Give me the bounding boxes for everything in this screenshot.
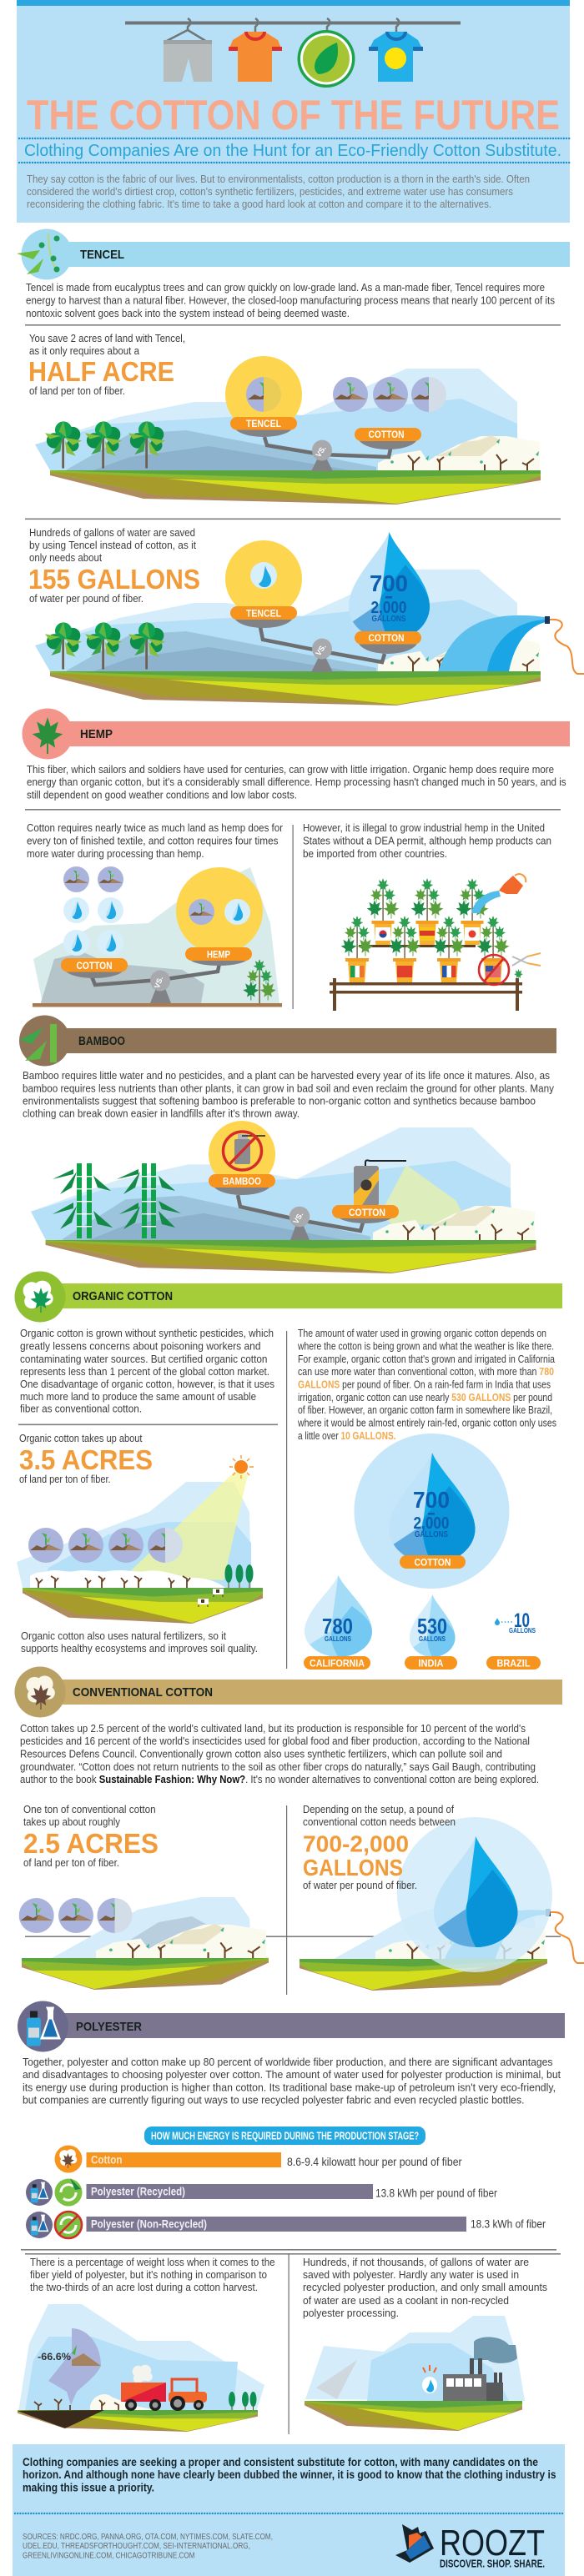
text: 3.5 acres stat: 3.5 ACRES <box>19 1444 153 1475</box>
land icons <box>333 377 446 412</box>
bar chart: energy required <box>26 2127 546 2238</box>
water numbers: 2,000 <box>370 599 407 617</box>
hose and water <box>438 615 584 674</box>
tencel pan <box>225 540 302 628</box>
text: 700-2,000 gallons stat <box>303 1803 456 1891</box>
icon: Roozt arrow <box>395 2524 434 2563</box>
scene: bamboo vs cotton <box>31 1121 536 1273</box>
cows <box>198 1589 224 1607</box>
text: half acre stat <box>28 332 185 397</box>
tencel pan: TENCEL <box>246 418 281 429</box>
lower plants <box>341 916 509 983</box>
text: 700-2,000 gallons stat: 700-2,000 <box>303 1831 409 1856</box>
text: hemp description: still dependent on good weather conditions and low labor costs. <box>27 789 297 801</box>
tencel pan: TENCEL <box>246 607 281 619</box>
bamboo stalks <box>53 1163 181 1238</box>
text: Tencel description <box>26 281 555 319</box>
text: polyester water use: of water are used as a coolant in non-recycled <box>303 2294 509 2307</box>
cotton pan with pesticide <box>332 1160 406 1223</box>
text: sources: SOURCES: NRDC.ORG, PANNA.ORG, OTA.COM, NYTIMES.COM, SLATE.COM, <box>23 2532 273 2542</box>
text: hemp land and water: more water during processing than hemp. <box>27 847 204 860</box>
heading: Hemp <box>22 709 570 759</box>
text: fiber yield: There is a percentage of weight loss when it comes to the <box>30 2256 275 2268</box>
heading: Organic Cotton <box>15 1271 562 1323</box>
text: polyester description: and disadvantages to choosing polyester over cotton. The amount of water used for polyester production is minimal, but <box>23 2068 561 2081</box>
cotton pan <box>349 532 430 654</box>
text: polyester description <box>23 2056 561 2106</box>
text: polyester water use: saved with polyester. Hardly any water is used in <box>303 2268 519 2281</box>
text: 2.5 acres stat: 2.5 ACRES <box>23 1828 159 1859</box>
icon: conventional cotton boll <box>26 1675 55 1710</box>
india drop: GALLONS <box>419 1635 446 1643</box>
text: organic cotton water use: can use more water than conventional cotton, with more than 780 <box>298 1365 554 1378</box>
text: 155 gallons stat: only needs about <box>29 551 102 564</box>
text: conclusion: making this issue a priority. <box>23 2482 154 2493</box>
upper plants <box>359 878 488 947</box>
icon: tractor <box>121 2365 207 2411</box>
india drop: 530 <box>417 1614 447 1639</box>
row: polyester recycled: 13.8 kWh per pound of fiber <box>375 2187 497 2200</box>
land icons <box>28 1528 183 1563</box>
icon: orange shirt <box>229 18 282 82</box>
text: polyester description: Together, polyester and cotton make up 80 percent of worldwide fiber production, and there are significant advantages <box>23 2056 553 2068</box>
india drop: INDIA <box>419 1658 444 1670</box>
text: 3.5 acres stat: Organic cotton takes up about <box>19 1432 143 1444</box>
text: organic cotton description <box>20 1327 274 1414</box>
california drop: GALLONS <box>325 1635 352 1643</box>
text: organic cotton description: greatly lessens concerns about poisoning workers and <box>20 1339 260 1353</box>
cotton pan with pesticide: COTTON <box>349 1207 385 1218</box>
text: 700-2,000 gallons stat: conventional cotton needs between <box>303 1815 456 1828</box>
cotton drop: 2,000 <box>414 1514 449 1533</box>
icon: clothes rack <box>125 18 461 88</box>
heading: Organic Cotton: ORGANIC COTTON <box>73 1289 173 1303</box>
text: hemp land and water: every ton of finished textile, and cotton requires four times <box>27 834 279 847</box>
intro text: considered the world's dirtiest crop, cotton's synthetic fertilizers, pesticides, and extreme water use has consumers <box>27 185 513 198</box>
text: bamboo description <box>23 1069 554 1119</box>
text: polyester water use: polyester processing. <box>303 2307 399 2319</box>
text: half acre stat: as it only requires about a <box>29 344 140 357</box>
water numbers <box>370 570 408 624</box>
icon: prohibition sign <box>479 955 509 985</box>
row: polyester recycled: Polyester (Recycled) <box>91 2185 185 2198</box>
text: 700-2,000 gallons stat: GALLONS <box>303 1855 403 1881</box>
text: 2.5 acres stat: of land per ton of fiber. <box>23 1856 119 1869</box>
water numbers: GALLONS <box>372 615 406 624</box>
text: conventional cotton description: author to the book Sustainable Fashion: Why Now?. It's no wonder alternatives to conventional cotton are being explored. <box>20 1773 539 1785</box>
text: sources: GREENLIVINGONLINE.COM, CHICAGOTRIBUNE.COM <box>23 2550 195 2560</box>
cotton pan <box>61 958 128 978</box>
scale: tencel vs cotton water: VS. <box>314 642 328 657</box>
text: conventional cotton description <box>20 1722 539 1785</box>
scale arm <box>92 963 219 1003</box>
text: sources: UDEL.EDU, THREADSFORTHOUGHT.COM, SEI-INTERNATIONAL.ORG, <box>23 2541 250 2551</box>
scene: water comparison <box>35 532 584 706</box>
text: conventional cotton description: pesticides and 16 percent of the world's insecticides used for global food and fiber production, according to the National <box>20 1735 530 1747</box>
row: cotton: 8.6-9.4 kilowatt hour per pound of fiber <box>287 2156 462 2168</box>
scene: factory <box>305 2316 525 2431</box>
text: polyester water use: Hundreds, if not thousands, of gallons of water are <box>303 2256 529 2268</box>
row: polyester recycled <box>26 2178 497 2207</box>
icon: water alert <box>422 2365 437 2393</box>
text: organic cotton water use <box>297 1327 556 1442</box>
text: conventional cotton description: groundwater. “Cotton does not return nutrients to the soil as other fiber crops do naturally,” says Gail Baugh, contributing <box>20 1760 536 1773</box>
text: polyester description: its energy use during production is higher than cotton. Its traditional base make-up of petroleum isn't very eco-friendly, <box>23 2081 556 2093</box>
heading: Polyester <box>18 2001 565 2051</box>
california drop: 780 <box>322 1614 353 1639</box>
cotton pan: COTTON <box>77 960 112 972</box>
text: 700-2,000 gallons stat: of water per pound of fiber. <box>303 1879 417 1891</box>
heading: Polyester: POLYESTER <box>76 2020 142 2034</box>
icon: green leaf badge <box>297 18 355 88</box>
text: organic cotton water use: irrigation, organic cotton can use nearly 530 GALLONS per pound <box>298 1391 552 1403</box>
intro text: reconsidering the clothing fabric. It's time to take a good hard look at cotton and compare it to the alternatives. <box>27 198 491 210</box>
california drop: CALIFORNIA <box>310 1658 365 1670</box>
row: polyester non-recycled: Polyester (Non-Recycled) <box>91 2217 207 2230</box>
text: half acre stat: of land per ton of fiber. <box>29 384 125 397</box>
panel: conclusion footer <box>13 2444 565 2576</box>
hemp balloon: HEMP <box>207 949 230 961</box>
land and water icons: cotton <box>63 866 123 956</box>
icon: hemp plant <box>243 959 276 1003</box>
text: hemp legality: However, it is illegal to grow industrial hemp in the United <box>303 821 545 834</box>
text: half acre stat: You save 2 acres of land with Tencel, <box>29 332 185 344</box>
text: organic cotton water use: a little over 10 GALLONS. <box>298 1429 395 1442</box>
text: 700-2,000 gallons stat: Depending on the setup, a pound of <box>303 1803 454 1815</box>
text: hemp legality: States without a DEA permit, although hemp products can <box>303 834 551 847</box>
scene: conventional water <box>300 1817 584 1991</box>
panel: header <box>17 0 570 223</box>
text: conclusion <box>23 2456 556 2493</box>
text: conventional cotton description: Cotton takes up 2.5 percent of the world's cultivated land, but its production is responsible for 10 percent of the world's <box>20 1722 526 1735</box>
row: polyester non-recycled <box>26 2212 546 2238</box>
text: 155 gallons stat: 155 GALLONS <box>28 564 200 595</box>
row: cotton: Cotton <box>91 2153 122 2167</box>
trees <box>225 1564 254 1588</box>
water numbers: 700 <box>370 570 408 596</box>
text: polyester water use <box>303 2256 547 2319</box>
heading: Bamboo: BAMBOO <box>78 1034 125 1048</box>
scale arm <box>238 1195 363 1240</box>
text: hemp description <box>27 763 566 801</box>
trees <box>229 2392 257 2410</box>
text: fiber yield: fiber yield of polyester, but it's nothing in comparison to <box>30 2268 267 2281</box>
text: 2.5 acres stat: One ton of conventional cotton <box>23 1803 156 1815</box>
heading: Tencel: TENCEL <box>80 248 124 262</box>
icon: eucalyptus <box>17 233 60 274</box>
scene: land comparison <box>35 356 541 505</box>
scene: harvest <box>18 2304 264 2432</box>
text: conclusion: Clothing companies are seeking a proper and consistent substitute for cotton, with many candidates on the <box>23 2456 538 2468</box>
subtitle: Clothing Companies Are on the Hunt for an Eco-Friendly Cotton Substitute. <box>24 142 561 160</box>
heading: Bamboo <box>19 1016 556 1066</box>
icon: scissors <box>512 953 541 966</box>
text: hemp land and water: Cotton requires nearly twice as much land as hemp does for <box>27 821 284 834</box>
icon: organic cotton boll <box>23 1281 53 1313</box>
logo: Roozt: DISCOVER. SHOP. SHARE. <box>440 2558 545 2570</box>
text: 155 gallons stat <box>28 526 200 605</box>
text: fiber yield: the two-thirds of an acre lost during a cotton harvest. <box>30 2281 258 2293</box>
chart: water use drops <box>304 1434 541 1670</box>
bamboo balloon <box>209 1121 275 1195</box>
text: organic cotton description: represents less than 1 percent of the global cotton market. <box>20 1365 269 1378</box>
hemp balloon <box>176 867 263 966</box>
scene: organic farm <box>17 1455 263 1624</box>
heading: Conventional Cotton: CONVENTIONAL COTTON <box>73 1685 213 1700</box>
brazil drop: GALLONS <box>509 1627 536 1634</box>
scene: conventional land <box>19 1897 269 1990</box>
chart title: HOW MUCH ENERGY IS REQUIRED DURING THE PRODUCTION STAGE? <box>151 2130 419 2142</box>
bench <box>330 978 522 1011</box>
text: organic cotton description: fiber as conventional cotton. <box>20 1403 142 1414</box>
text: organic cotton description: Organic cotton is grown without synthetic pesticides, which <box>20 1327 274 1339</box>
intro text: They say cotton is the fabric of our lives. But to environmentalists, cotton production is a thorn in the earth's side. Often <box>27 173 530 185</box>
text: polyester water use: recycled polyester production, and only small amounts <box>303 2281 547 2293</box>
row: cotton <box>55 2145 462 2173</box>
cotton field <box>34 2394 159 2410</box>
icon: factory <box>443 2337 517 2401</box>
text: hemp land and water <box>27 821 284 860</box>
icon: blue shirt <box>369 18 423 82</box>
brazil drop: 10 <box>514 1609 530 1632</box>
icon: polyester flask <box>18 2001 68 2051</box>
label: loss percentage: -66.6% <box>38 2351 71 2363</box>
text: 3.5 acres stat: of land per ton of fiber. <box>19 1473 111 1485</box>
text: hemp legality <box>303 821 551 860</box>
text: polyester description: but companies are currently figuring out ways to use recycled polyester fabric and even recycled plastic bottles. <box>23 2093 524 2106</box>
heading: Hemp: HEMP <box>80 727 113 741</box>
text: sources <box>23 2532 273 2560</box>
text: organic cotton description: contaminating water sources. But certified organic cotton <box>20 1353 267 1365</box>
text: fiber yield <box>30 2256 275 2293</box>
spray cone <box>380 1165 467 1224</box>
text: 2.5 acres stat: takes up about roughly <box>23 1815 120 1828</box>
brazil drop <box>486 1609 541 1670</box>
illustration: potted hemp on bench <box>330 874 541 1011</box>
text: natural fertilizers: supports healthy ecosystems and improves soil quality. <box>21 1642 258 1655</box>
icon: bamboo <box>20 1024 57 1062</box>
text: 155 gallons stat: Hundreds of gallons of water are saved <box>29 526 195 539</box>
icon: watering can <box>471 874 526 913</box>
text: hemp legality: be imported from other countries. <box>303 847 447 860</box>
cotton field <box>30 1570 225 1588</box>
land loss plume <box>48 2328 101 2405</box>
icon: hemp leaf <box>33 717 63 754</box>
text: organic cotton description: One disadvantage of organic cotton, however, is that it uses <box>20 1378 274 1390</box>
cotton drop: COTTON <box>414 1556 451 1568</box>
intro text <box>27 173 530 210</box>
text: half acre stat: HALF ACRE <box>28 356 174 387</box>
text: 2.5 acres stat <box>23 1803 159 1869</box>
text: bamboo description: environmentalists suggest that softening bamboo is preferable to non-organic cotton and synthetics because bamboo <box>23 1094 536 1107</box>
heading: Conventional Cotton <box>15 1666 562 1718</box>
logo: Roozt <box>395 2523 545 2570</box>
cotton drop: GALLONS <box>415 1530 448 1539</box>
row: polyester non-recycled: 18.3 kWh of fiber <box>471 2218 546 2230</box>
bamboo balloon: BAMBOO <box>223 1176 261 1188</box>
tencel pan <box>225 356 302 437</box>
text: bamboo description: clothing can break down easier in landfills after it's thrown away. <box>23 1107 300 1119</box>
heading: Tencel <box>17 228 570 280</box>
california drop <box>304 1575 372 1670</box>
text: organic cotton description: much more land to produce the same amount of usable <box>20 1390 256 1403</box>
icon: sun <box>125 1455 254 1580</box>
text: 3.5 acres stat <box>19 1432 153 1485</box>
hose <box>445 1909 584 1963</box>
cotton pan: COTTON <box>369 429 404 440</box>
text: 155 gallons stat: of water per pound of fiber. <box>29 592 143 605</box>
scale: tencel vs cotton water <box>225 532 430 672</box>
text: Tencel description: nontoxic solvent goes back into the system instead of being deemed waste. <box>26 307 350 319</box>
land icons <box>19 1898 133 1933</box>
scale: tencel vs cotton: VS. <box>314 444 328 459</box>
india drop <box>405 1594 457 1670</box>
brazil drop: BRAZIL <box>497 1658 531 1670</box>
text: conventional cotton description: Resources Defens Council. Conventionally grown cotton also uses synthetic fertilizers, which can pollute soil and <box>20 1748 502 1760</box>
text: natural fertilizers: Organic cotton also uses natural fertilizers, so it <box>21 1629 226 1642</box>
scale: tencel vs cotton <box>225 356 446 471</box>
cotton pan <box>355 428 421 449</box>
cotton drop <box>389 1453 476 1569</box>
cotton pan: COTTON <box>369 632 404 644</box>
icon: hanging jeans <box>164 18 212 82</box>
text: natural fertilizers <box>21 1629 258 1655</box>
scale arm: VS. <box>153 975 164 990</box>
cotton drop: 700 <box>413 1487 450 1513</box>
text: 155 gallons stat: by using Tencel instead of cotton, as it <box>29 539 196 551</box>
logo: Roozt: ROOZT <box>440 2523 545 2563</box>
scene: hemp scale <box>33 866 282 1007</box>
chart title <box>144 2127 425 2145</box>
scale arm: VS. <box>291 1211 305 1225</box>
